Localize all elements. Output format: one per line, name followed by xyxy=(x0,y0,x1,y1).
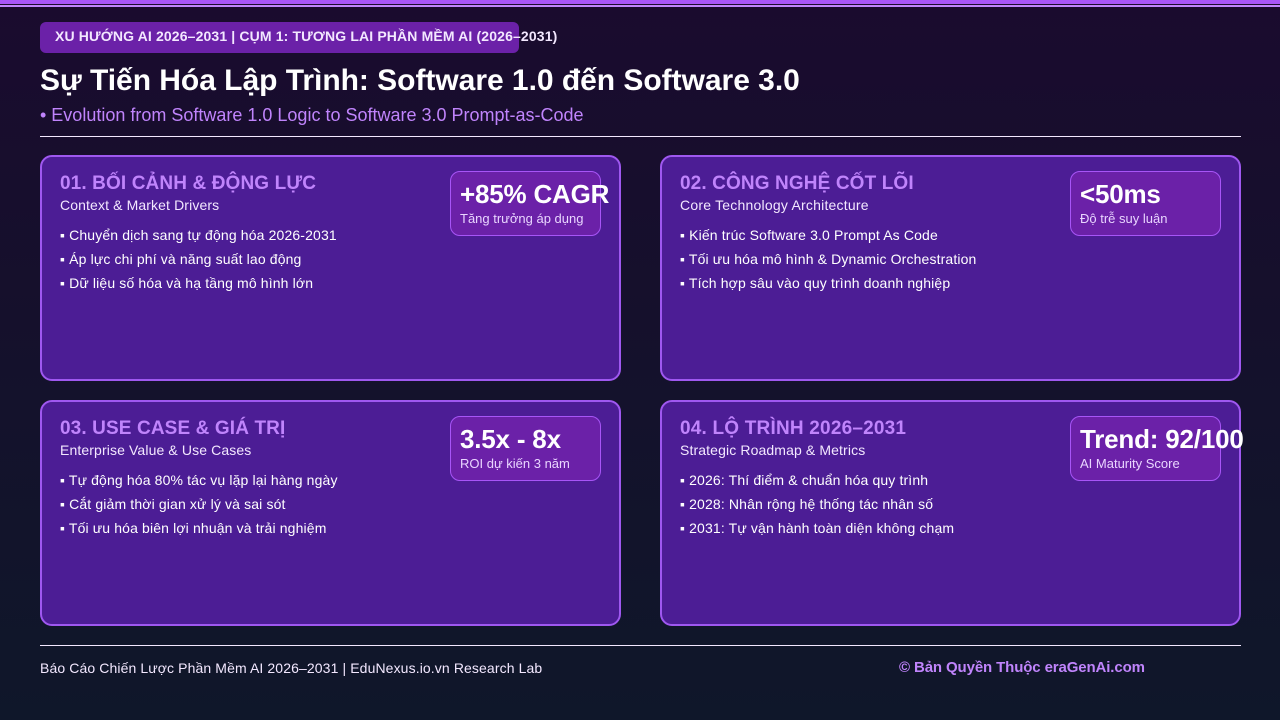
panel 3 subheading: Enterprise Value & Use Cases xyxy=(60,442,251,458)
panel: core technology xyxy=(660,155,1241,381)
panel 4 heading: 04. LỘ TRÌNH 2026–2031 xyxy=(680,418,906,439)
panel 4 subheading: Strategic Roadmap & Metrics xyxy=(680,442,865,458)
header divider xyxy=(40,136,1241,137)
panel: context and market drivers xyxy=(40,155,621,381)
panel 3 metric callout: ROI dự kiến 3 năm xyxy=(460,456,570,471)
panel 3 bullet list: ▪ Cắt giảm thời gian xử lý và sai sót xyxy=(60,496,286,512)
badge text: XU HƯỚNG AI 2026–2031 | CỤM 1: TƯƠNG LAI PHẦN MỀM AI (2026–2031) xyxy=(55,28,557,44)
top accent bar xyxy=(0,0,1280,8)
panel: roadmap xyxy=(660,400,1241,626)
panel 1 metric callout: +85% CAGR xyxy=(460,179,609,209)
panel 1 metric callout xyxy=(450,171,601,236)
panel 1 bullet list: ▪ Áp lực chi phí và năng suất lao động xyxy=(60,251,301,267)
panel 2 bullet list: ▪ Tối ưu hóa mô hình & Dynamic Orchestration xyxy=(680,251,976,267)
subtitle: • Evolution from Software 1.0 Logic to Software 3.0 Prompt-as-Code xyxy=(40,105,584,125)
panel 1 subheading: Context & Market Drivers xyxy=(60,197,219,213)
panel 4 bullet list: ▪ 2026: Thí điểm & chuẩn hóa quy trình xyxy=(680,472,928,488)
panel 4 metric callout: AI Maturity Score xyxy=(1080,456,1180,471)
panel 2 bullet list: ▪ Kiến trúc Software 3.0 Prompt As Code xyxy=(680,227,938,243)
footer divider xyxy=(40,645,1241,646)
panel 3 metric callout xyxy=(450,416,601,481)
panel 2 subheading: Core Technology Architecture xyxy=(680,197,869,213)
panel 2 bullet list xyxy=(680,227,976,291)
panel 4 bullet list: ▪ 2031: Tự vận hành toàn diện không chạm xyxy=(680,520,954,536)
panel 3 bullet list: ▪ Tối ưu hóa biên lợi nhuận và trải nghiệm xyxy=(60,520,327,536)
title: Sự Tiến Hóa Lập Trình: Software 1.0 đến Software 3.0 xyxy=(40,64,800,97)
panel 3 metric callout: 3.5x - 8x xyxy=(460,424,561,454)
footer source text: Báo Cáo Chiến Lược Phần Mềm AI 2026–2031 | EduNexus.io.vn Research Lab xyxy=(40,660,542,676)
panel 2 metric callout: <50ms xyxy=(1080,179,1161,209)
panel 4 bullet list xyxy=(680,472,954,536)
panel 2 bullet list: ▪ Tích hợp sâu vào quy trình doanh nghiệp xyxy=(680,275,950,291)
panel 4 metric callout xyxy=(1070,416,1221,481)
panel 2 metric callout xyxy=(1070,171,1221,236)
panel 2 heading: 02. CÔNG NGHỆ CỐT LÕI xyxy=(680,173,914,194)
panel 3 bullet list: ▪ Tự động hóa 80% tác vụ lặp lại hàng ngày xyxy=(60,472,338,488)
footer copyright: © Bản Quyền Thuộc eraGenAi.com xyxy=(899,659,1145,676)
panel: use cases and value xyxy=(40,400,621,626)
panel 1 bullet list xyxy=(60,227,337,291)
panel 1 bullet list: ▪ Chuyển dịch sang tự động hóa 2026-2031 xyxy=(60,227,337,243)
category badge xyxy=(40,22,519,53)
panel 1 metric callout: Tăng trưởng áp dụng xyxy=(460,211,583,226)
panel 1 heading: 01. BỐI CẢNH & ĐỘNG LỰC xyxy=(60,173,316,194)
panel 4 bullet list: ▪ 2028: Nhân rộng hệ thống tác nhân số xyxy=(680,496,933,512)
panel 3 bullet list xyxy=(60,472,338,536)
panel 4 metric callout: Trend: 92/100 xyxy=(1080,424,1244,454)
panel 2 metric callout: Độ trễ suy luận xyxy=(1080,211,1167,226)
panel 1 bullet list: ▪ Dữ liệu số hóa và hạ tầng mô hình lớn xyxy=(60,275,313,291)
panel 3 heading: 03. USE CASE & GIÁ TRỊ xyxy=(60,418,285,439)
